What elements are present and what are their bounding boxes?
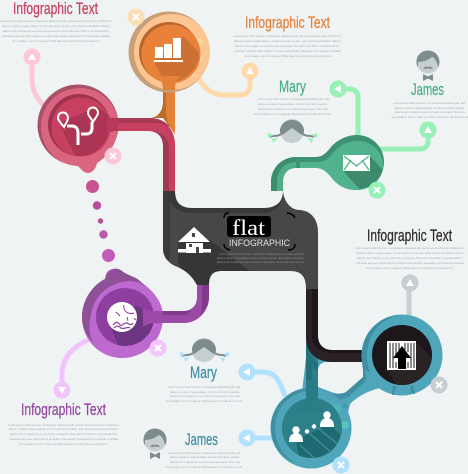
text block: centre panel: laboris nisi ut aliquip ex ea commodo consequat. Duis aute irure dolor in xyxy=(217,260,304,264)
text block: Mary blue: non proident, sunt in culpa qui officia deserunt mollit anim id est xyxy=(165,399,242,403)
text block: red xyxy=(0,19,111,43)
avatar: James green xyxy=(416,50,440,81)
text block: Mary green: non proident, sunt in culpa qui officia deserunt mollit anim id est xyxy=(254,112,331,116)
logo: flat infographic: INFOGRAPHIC xyxy=(229,238,290,248)
text block: Mary blue: labore et dolore magna aliqua. Ut enim ad minim veniam, xyxy=(170,390,240,394)
icon: route pins xyxy=(58,108,98,145)
text block: red: Lorem ipsum dolor sit amet, consectetur adipisicing elit, sed do eiusmod tempor incididunt ut xyxy=(0,19,111,23)
purple connector pipe xyxy=(150,285,209,323)
icon: sun and waves xyxy=(107,302,137,332)
text block: James green xyxy=(391,101,468,119)
text block: orange: Lorem ipsum dolor sit amet, consectetur adipisicing elit, sed do eiusmod tempor incididunt ut xyxy=(233,34,342,38)
text block: purple: voluptate velit esse cillum dolore eu fugiat nulla pariatur. Excepteur sint occaecat cupidatat xyxy=(9,437,118,441)
close badge: grey xyxy=(430,376,448,394)
text block: James blue: laboris nisi ut aliquip ex ea commodo consequat. Duis aute xyxy=(170,460,240,464)
title: orange infographic text: Infographic Text xyxy=(245,13,330,32)
text block: orange: voluptate velit esse cillum dolore eu fugiat nulla pariatur. Excepteur sint occaecat cupidatat xyxy=(234,49,341,53)
circle: teal xyxy=(270,380,352,470)
close badge: red xyxy=(104,148,122,164)
circle: orange xyxy=(128,12,210,92)
text block: James blue: Lorem ipsum dolor sit amet, consectetur adipisicing elit, sed xyxy=(168,451,240,455)
arrow: pink tail xyxy=(24,48,44,106)
text block: purple: non proident, sunt in culpa qui officia deserunt mollit anim id est laborum. xyxy=(19,442,108,446)
arrow: blue tail lower xyxy=(238,430,275,446)
close badge: green xyxy=(368,182,386,198)
text block: purple xyxy=(8,423,119,446)
logo: flat infographic: flat xyxy=(232,215,265,240)
text block: red: non proident, sunt in culpa qui officia deserunt mollit anim id est laborum. xyxy=(12,39,100,43)
avatar: Mary green xyxy=(268,119,317,143)
text block: James blue xyxy=(165,451,242,469)
text block: orange: laboris nisi ut aliquip ex ea commodo consequat. Duis aute irure dolor in reprehenderit in xyxy=(235,44,340,48)
avatar: James blue xyxy=(144,428,166,459)
icon: house xyxy=(178,227,211,253)
title: purple infographic text: Infographic Text xyxy=(21,400,106,419)
text block: Mary blue xyxy=(165,385,242,403)
green connector pipe xyxy=(271,157,320,191)
text block: black: non proident, sunt in culpa qui officia deserunt mollit anim id est laborum. xyxy=(366,266,454,270)
text block: black xyxy=(355,246,465,270)
text block: purple: labore et dolore magna aliqua. Ut enim ad minim veniam, quis nostrud exercitation ullamco xyxy=(9,427,118,431)
logo: flat infographic xyxy=(224,213,295,250)
icon: envelope xyxy=(343,155,370,171)
red connector pipe xyxy=(105,118,175,192)
text block: Mary blue: laboris nisi ut aliquip ex ea commodo consequat. Duis aute xyxy=(170,394,240,398)
icon: bar chart xyxy=(154,38,183,62)
close badge: blue xyxy=(332,456,350,474)
text block: centre panel: labore et dolore magna aliqua. Ut enim ad minim veniam, quis nostrud exercitation xyxy=(217,256,304,260)
arrow: green tail right xyxy=(378,122,436,149)
text block: Mary green: laboris nisi ut aliquip ex ea commodo consequat. Duis aute xyxy=(258,107,328,111)
text block: centre panel: Lorem ipsum dolor sit amet, consectetur adipisicing elit, sed do eiusmod xyxy=(219,252,304,256)
arrow: green tail up-left xyxy=(330,80,358,136)
text block: red: labore et dolore magna aliqua. Ut enim ad minim veniam, quis nostrud exercitation ullamco xyxy=(2,24,110,28)
text block: Mary blue: Lorem ipsum dolor sit amet, consectetur adipisicing elit, sed xyxy=(168,385,240,389)
heading: James blue: James xyxy=(185,430,218,449)
circle: red xyxy=(38,84,120,173)
circle: dark blue xyxy=(362,314,442,396)
circle: purple xyxy=(82,269,163,358)
dots trail xyxy=(86,180,115,262)
circle: green xyxy=(296,135,384,190)
text block: centre panel xyxy=(217,252,304,264)
arrow: orange tail xyxy=(198,62,258,95)
text block: red: voluptate velit esse cillum dolore eu fugiat nulla pariatur. Excepteur sint occaecat cupidatat xyxy=(2,34,110,38)
black connector pipe xyxy=(306,289,378,362)
arrow: purple tail xyxy=(54,339,90,398)
teal connector xyxy=(300,340,380,425)
close badge: orange xyxy=(128,8,144,26)
arrow: grey tail xyxy=(402,274,418,318)
text block: Mary green xyxy=(254,97,331,116)
text block: orange xyxy=(233,34,342,58)
text block: James blue: labore et dolore magna aliqua. Ut enim ad minim veniam, xyxy=(170,455,240,459)
text block: purple: laboris nisi ut aliquip ex ea commodo consequat. Duis aute irure dolor in reprehenderit in xyxy=(10,432,117,436)
text block: orange: non proident, sunt in culpa qui officia deserunt mollit anim id est laborum. xyxy=(244,54,332,58)
heading: Mary blue: Mary xyxy=(190,363,217,382)
text block: red: laboris nisi ut aliquip ex ea commodo consequat. Duis aute irure dolor in reprehenderit in xyxy=(3,29,109,33)
text block: purple: Lorem ipsum dolor sit amet, consectetur adipisicing elit, sed do eiusmod tempor incididunt ut xyxy=(8,423,119,427)
icon: up arrow label xyxy=(387,341,416,370)
text block: James blue: non proident, sunt in culpa qui officia deserunt mollit anim id est xyxy=(165,465,242,469)
heading: James green: James xyxy=(411,80,444,99)
heading: Mary green: Mary xyxy=(279,77,306,96)
text block: Mary green: labore et dolore magna aliqua. Ut enim ad minim veniam, xyxy=(258,102,328,106)
close badge: purple xyxy=(150,340,166,356)
arrow: blue tail upper xyxy=(238,364,285,396)
avatar: Mary blue xyxy=(180,338,229,362)
icon: people xyxy=(289,411,334,442)
text block: orange: labore et dolore magna aliqua. Ut enim ad minim veniam, quis nostrud exercitation ullamco xyxy=(234,39,341,43)
orange connector pipe xyxy=(152,78,175,134)
text block: Mary green: Lorem ipsum dolor sit amet, consectetur adipisicing elit, sed xyxy=(257,97,329,101)
central dark panel xyxy=(160,191,318,290)
